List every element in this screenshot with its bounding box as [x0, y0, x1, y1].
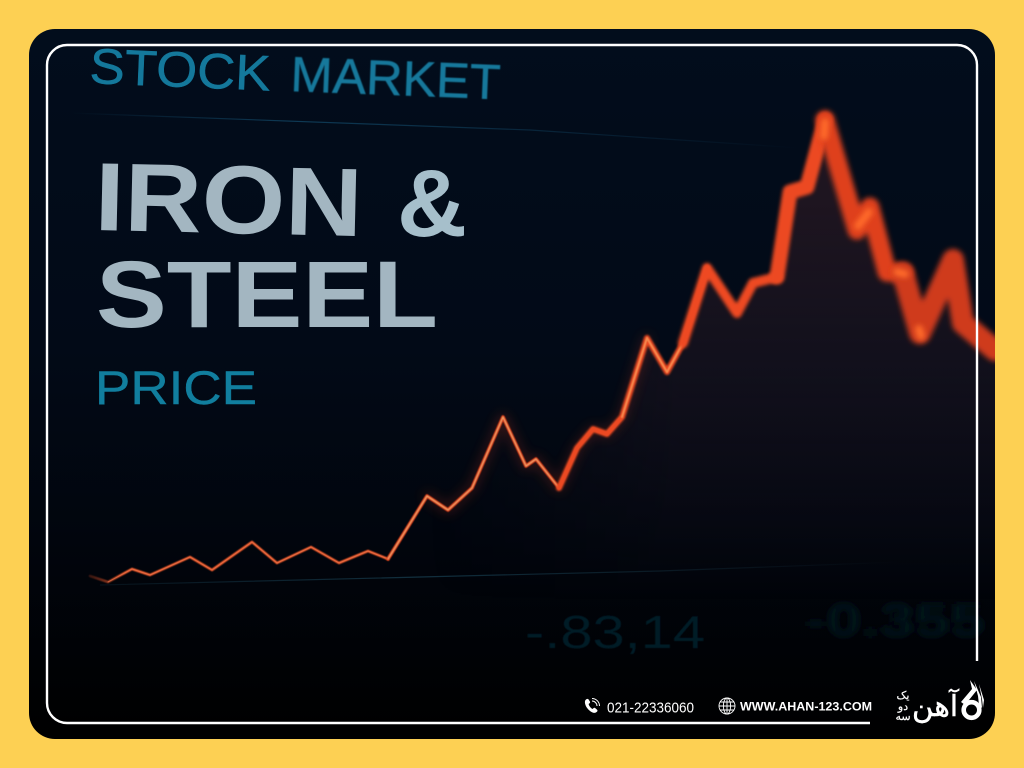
word: steel: STEEL: [96, 242, 438, 348]
line segment: mid climb: [559, 268, 707, 488]
logo mark: [961, 680, 984, 718]
logo: [895, 680, 984, 724]
footer contact: [585, 698, 872, 716]
logo small text: دو: [897, 701, 908, 713]
heading: iron and steel: [94, 142, 467, 348]
top divider line: [70, 113, 800, 148]
line segment: flat start: [90, 542, 388, 582]
chart area fill: [612, 152, 995, 480]
heading: stock market: [89, 38, 501, 110]
word: market: MARKET: [290, 48, 501, 110]
text: website: WWW.AHAN-123.COM: [740, 702, 872, 714]
icon: globe: [719, 698, 735, 714]
logo small text: یک: [897, 690, 909, 702]
icon: phone: [585, 698, 600, 713]
line chart: [90, 120, 995, 600]
line segment: upper climb: [683, 268, 777, 343]
line segment: blurred end: [903, 260, 995, 350]
logo small text: سه: [895, 711, 911, 723]
faded number right: -0.355: [805, 594, 985, 646]
label: price: PRICE: [95, 361, 257, 414]
symbol: ampersand: &: [397, 150, 467, 257]
line glow: [427, 338, 647, 510]
word: iron: IRON: [94, 142, 364, 257]
line segment: first climb: [388, 417, 622, 559]
line segment: descent: [825, 120, 903, 273]
bottom axis line: [100, 562, 900, 585]
line segment: peak: [777, 120, 825, 277]
logo small text: [895, 690, 911, 723]
faded number left: -.83,14: [525, 606, 705, 658]
text: phone number: 021-22336060: [607, 700, 694, 716]
logo wordmark: آهن: [912, 689, 960, 724]
peak highlight: [824, 122, 921, 336]
word: stock: STOCK: [89, 38, 272, 102]
